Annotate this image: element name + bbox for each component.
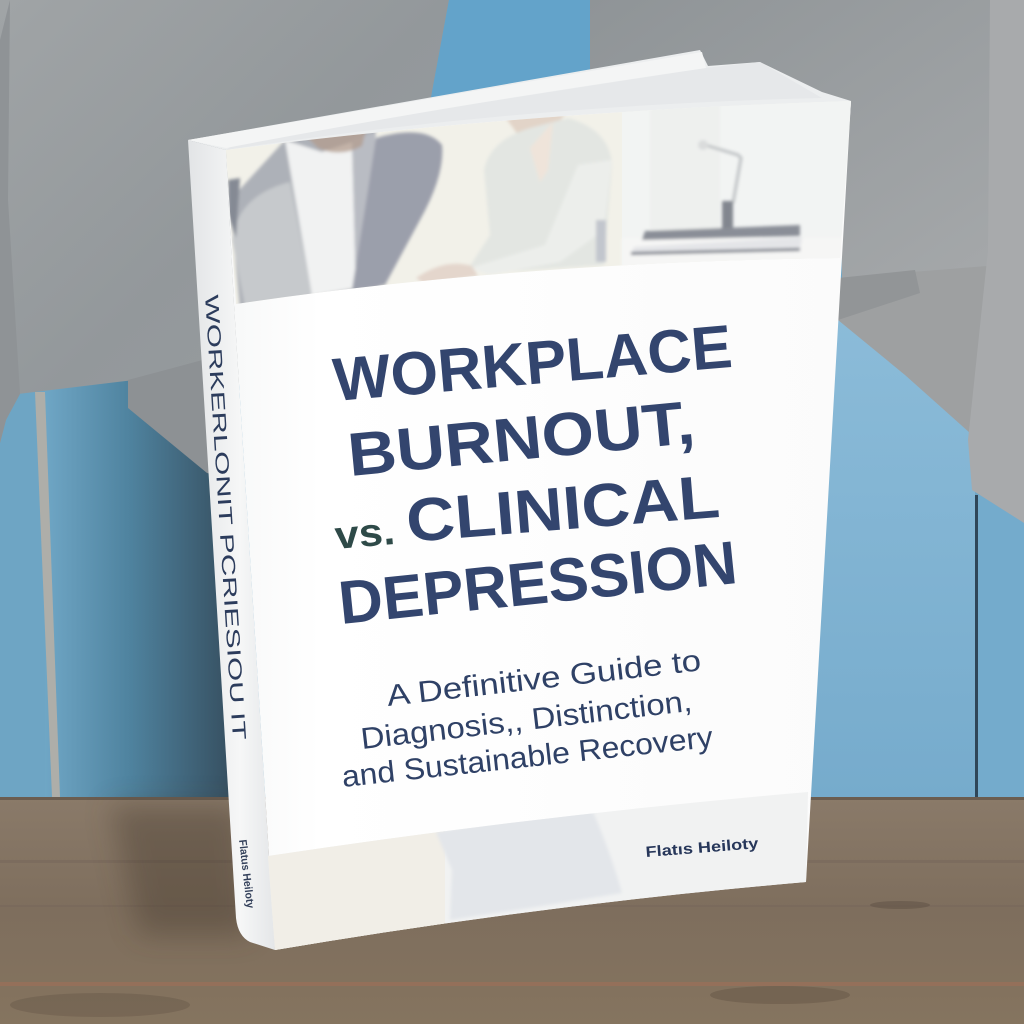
- wooden shelf: [0, 797, 1024, 1024]
- spine: [188, 140, 275, 950]
- desk lamp on books: [630, 140, 802, 257]
- subtitle line 2: Diagnosis,, Distinction,: [359, 685, 694, 756]
- subtitle line 1: A Definitive Guide to: [385, 644, 703, 713]
- spine title: WORKERLONIT PCRIESIOU IT: [200, 294, 249, 741]
- bottom band with figure: [268, 792, 808, 950]
- woman in cardigan: [416, 110, 612, 284]
- author name: Flatıs Heiloty: [645, 835, 760, 861]
- cover photo: office consultation: [220, 95, 860, 310]
- blue wall gap above book: [425, 0, 590, 130]
- book: [188, 50, 860, 955]
- title: Workplace Burnout vs. Clinical Depression: [330, 312, 740, 637]
- title line 2: BURNOUT,: [345, 388, 698, 489]
- vs. label: vs.: [333, 510, 397, 558]
- background: blue wooden wall: [0, 0, 1024, 800]
- title line 3: CLINICAL: [404, 462, 722, 555]
- title line 1: WORKPLACE: [330, 312, 735, 414]
- front cover: [226, 101, 851, 950]
- subtitle line 3: and Sustainable Recovery: [340, 721, 715, 794]
- subtitle: [340, 644, 715, 794]
- man with jacket: [228, 128, 442, 310]
- book pages block: [188, 50, 851, 150]
- spine author: Flatus Heiloty: [236, 839, 256, 910]
- grey blanket: [0, 0, 1024, 523]
- title line 4: DEPRESSION: [335, 528, 740, 637]
